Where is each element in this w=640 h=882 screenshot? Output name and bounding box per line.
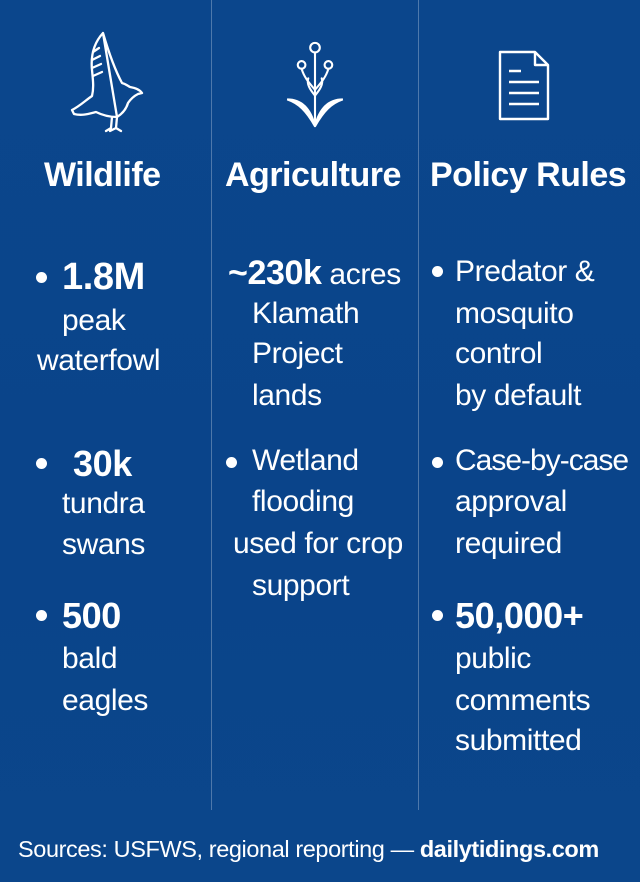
stat: 30k tundra swans: [36, 443, 146, 561]
stat: 50,000+ comments: comments: [455, 684, 590, 717]
stat: 50,000+ comments: [432, 595, 590, 757]
bullet: wetland flooding: Wetland: [252, 444, 359, 477]
icon: document: [498, 50, 550, 120]
stat: 230k acres: ~230k acres: [228, 254, 401, 292]
footer: sources: Sources: USFWS, regional reporting — dailytidings.com: [18, 836, 599, 862]
bullet: predator control: control: [455, 337, 542, 370]
bullet: wetland flooding: [226, 444, 403, 602]
stat: 500 bald eagles: [36, 595, 148, 717]
stat: 1.8M peak waterfowl: peak: [62, 304, 125, 337]
stat: 50,000+ comments: submitted: [455, 724, 581, 757]
panel: policy rules: [430, 50, 628, 757]
stat: 230k acres: Klamath: [252, 297, 359, 330]
stat: 30k tundra swans: tundra: [62, 487, 145, 520]
stat: 1.8M peak waterfowl: [36, 256, 160, 377]
heading: Policy Rules: Policy Rules: [430, 156, 626, 194]
panel: agriculture: [225, 42, 403, 602]
heading: Agriculture: Agriculture: [225, 156, 401, 194]
bullet: case-by-case: required: [455, 527, 562, 560]
stat: 30k tundra swans: swans: [62, 528, 145, 561]
panel: wildlife: [36, 32, 161, 717]
stat: 500 bald eagles: eagles: [62, 684, 148, 717]
bullet: predator control: by default: [455, 379, 581, 412]
stat: 500 bald eagles: 500: [62, 595, 121, 636]
heading: Wildlife: Wildlife: [44, 156, 161, 194]
stat: 230k acres: lands: [252, 379, 322, 412]
bullet: predator control: mosquito: [455, 297, 574, 330]
bullet: case-by-case: [432, 444, 628, 560]
bullet: predator control: [432, 255, 594, 412]
bullet: predator control: Predator &: [455, 255, 594, 288]
bullet: case-by-case: approval: [455, 485, 567, 518]
stat: 1.8M peak waterfowl: waterfowl: [37, 344, 160, 377]
stat: 230k acres: [228, 254, 401, 412]
stat: 500 bald eagles: bald: [62, 642, 117, 675]
stat: 50,000+ comments: public: [455, 642, 531, 675]
stat: 1.8M peak waterfowl: 1.8M: [62, 256, 145, 298]
bullet: case-by-case: Case-by-case: [455, 444, 628, 477]
bullet: wetland flooding: flooding: [252, 485, 354, 518]
icon: eagle: [70, 32, 144, 132]
icon: plant: [286, 42, 344, 128]
bullet: wetland flooding: used for crop: [233, 527, 403, 560]
stat: 230k acres: Project: [252, 337, 343, 370]
bullet: wetland flooding: support: [252, 569, 349, 602]
stat: 30k tundra swans: 30k: [73, 443, 132, 484]
stat: 50,000+ comments: 50,000+: [455, 595, 583, 636]
